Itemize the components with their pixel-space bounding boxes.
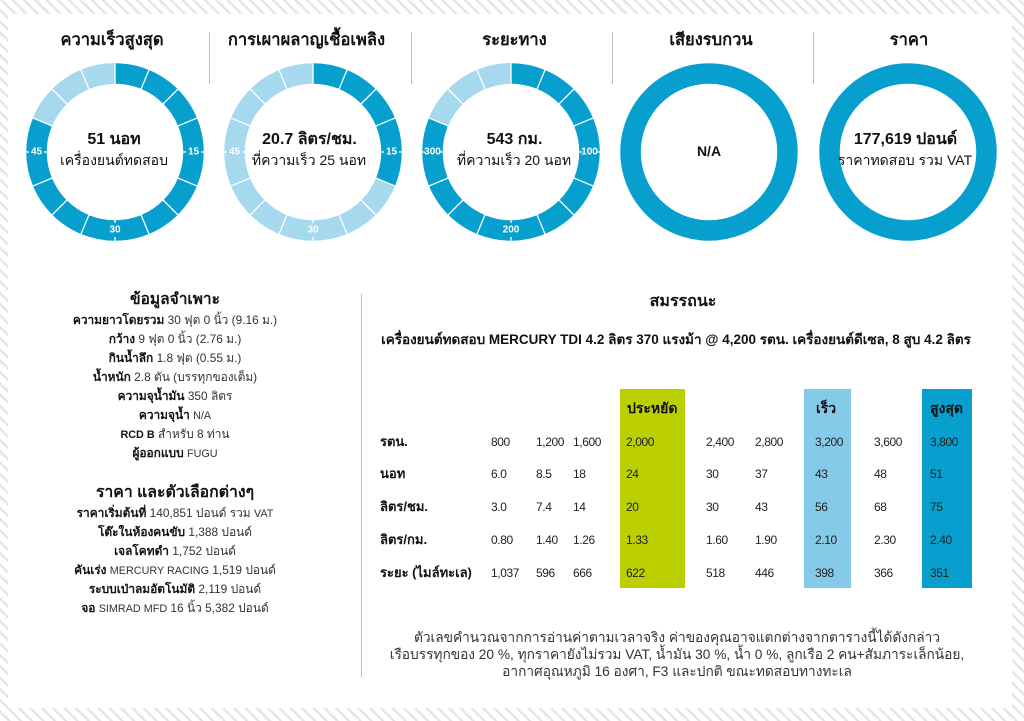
performance table: 666: [573, 566, 592, 580]
performance table: 6.0: [491, 467, 506, 481]
performance table: ลิตร/ชม.: [380, 499, 428, 514]
performance table: 3.0: [491, 500, 506, 514]
performance table: 398: [815, 566, 834, 580]
heading: specifications: ข้อมูลจำเพาะ: [130, 291, 220, 308]
column highlight: economy: [620, 389, 685, 588]
panel: price and options: [74, 484, 276, 615]
performance table: 366: [874, 566, 893, 580]
value: 51 knots: 51 นอท: [87, 131, 141, 148]
performance table: 1,200: [536, 435, 564, 449]
performance table: 2,400: [706, 435, 734, 449]
panel: fuel burn: [224, 27, 402, 241]
heading: price: ราคา: [890, 31, 928, 49]
gauge ring: range: 200: [503, 224, 520, 236]
performance table: 51: [930, 467, 943, 481]
options list: จอ SIMRAD MFD 16 นิ้ว 5,382 ปอนด์: [81, 601, 269, 615]
spec list: น้ำหนัก 2.8 ตัน (บรรทุกของเต็ม): [93, 370, 257, 384]
performance table: 1,037: [491, 566, 519, 580]
performance table: 75: [930, 500, 943, 514]
performance table: 2.40: [930, 533, 952, 547]
value: 177,619 pounds: 177,619 ปอนด์: [854, 131, 957, 148]
column highlight: maximum: [922, 389, 972, 588]
gauge ring: fuel burn: [224, 63, 402, 241]
caption: at 20 knots: ที่ความเร็ว 20 นอท: [457, 152, 571, 168]
gauge ring: top speed: [26, 63, 204, 241]
spec list: กว้าง 9 ฟุต 0 นิ้ว (2.76 ม.): [109, 332, 241, 346]
performance table: 1.40: [536, 533, 558, 547]
performance table: 1.90: [755, 533, 777, 547]
gauge ring: fuel burn: 30: [307, 224, 319, 236]
performance table: 2,000: [626, 435, 654, 449]
performance table: 48: [874, 467, 887, 481]
gauge ring: noise: [620, 63, 798, 241]
heading: price and options: ราคา และตัวเลือกต่างๆ: [96, 484, 254, 501]
performance table: 3,200: [815, 435, 843, 449]
spec list: RCD B สำหรับ 8 ท่าน: [120, 427, 230, 441]
performance table: 446: [755, 566, 774, 580]
heading: range: ระยะทาง: [482, 31, 547, 49]
performance table: 30: [706, 467, 719, 481]
performance table: 518: [706, 566, 725, 580]
panel: specifications: [73, 290, 277, 460]
spec list: [73, 312, 277, 460]
gauge ring: top speed: 15: [188, 146, 199, 158]
panel: noise: [620, 30, 798, 241]
gauge ring: range: 100: [581, 146, 598, 158]
gauge ring: fuel burn: 45: [229, 146, 240, 158]
panel: range: [422, 31, 600, 241]
performance table: 3,600: [874, 435, 902, 449]
spec list: ความยาวโดยรวม 30 ฟุต 0 นิ้ว (9.16 ม.): [73, 313, 277, 327]
spec list: ความจุน้ำ N/A: [139, 408, 211, 422]
value: not available: N/A: [697, 143, 721, 159]
footnote: เรือบรรทุกของ 20 %, ทุกราคายังไม่รวม VAT, น้ำมัน 30 %, น้ำ 0 %, ลูกเรือ 2 คน+สัมภาระเล็กน้อย,: [390, 647, 964, 662]
performance table: 800: [491, 435, 510, 449]
performance table: 43: [755, 500, 768, 514]
performance table: [380, 400, 963, 580]
performance table: 18: [573, 467, 586, 481]
value: 20.7 litres per hour: 20.7 ลิตร/ชม.: [262, 131, 357, 148]
gauge ring: fuel burn: 15: [386, 146, 397, 158]
footnote: [390, 628, 964, 680]
gauge ring: top speed: 45: [31, 146, 42, 158]
performance table: 43: [815, 467, 828, 481]
panel: top speed: [26, 29, 204, 241]
performance table: 68: [874, 500, 887, 514]
heading: performance: สมรรถนะ: [650, 293, 716, 310]
options list: ราคาเริ่มต้นที่ 140,851 ปอนด์ รวม VAT: [77, 506, 273, 520]
performance table: 7.4: [536, 500, 551, 514]
performance table: สูงสุด: [930, 400, 963, 416]
gauge ring: range: [422, 63, 600, 241]
performance table: 2.10: [815, 533, 837, 547]
performance table: รตน.: [380, 434, 408, 449]
options list: คันเร่ง MERCURY RACING 1,519 ปอนด์: [74, 563, 276, 577]
options list: [74, 504, 276, 615]
options list: โต๊ะในห้องคนขับ 1,388 ปอนด์: [98, 525, 252, 539]
performance table: 0.80: [491, 533, 513, 547]
performance table: ลิตร/กม.: [380, 532, 427, 547]
performance table: 30: [706, 500, 719, 514]
caption: at 25 knots: ที่ความเร็ว 25 นอท: [252, 152, 366, 168]
performance table: 3,800: [930, 435, 958, 449]
performance table: 37: [755, 467, 768, 481]
performance table: 8.5: [536, 467, 551, 481]
performance table: ประหยัด: [627, 400, 677, 416]
performance table: 351: [930, 566, 949, 580]
value: 543 km: 543 กม.: [487, 131, 542, 148]
heading: noise: เสียงรบกวน: [669, 31, 753, 49]
gauge ring: price: [819, 63, 997, 241]
gauge ring: range: 300: [424, 146, 441, 158]
footnote: อากาศอุณหภูมิ 16 องศา, F3 และปกติ ขณะทดสอบทางทะเล: [502, 664, 852, 679]
spec list: ความจุน้ำมัน 350 ลิตร: [118, 389, 232, 403]
gauge ring: top speed: 30: [109, 224, 121, 236]
column highlight: fast: [804, 389, 851, 588]
performance table: ระยะ (ไมล์ทะเล): [380, 565, 472, 580]
heading: fuel burn: การเผาผลาญเชื้อเพลิง: [228, 31, 385, 49]
caption: test engine: เครื่องยนต์ทดสอบ: [60, 152, 168, 168]
performance table: 56: [815, 500, 828, 514]
footnote: ตัวเลขคำนวณจากการอ่านค่าตามเวลาจริง ค่าของคุณอาจแตกต่างจากตารางนี้ได้ดังกล่าว: [414, 630, 940, 645]
performance table: 596: [536, 566, 555, 580]
performance table: 1,600: [573, 435, 601, 449]
heading: top speed: ความเร็วสูงสุด: [60, 31, 164, 49]
performance table: 20: [626, 500, 639, 514]
engine description: เครื่องยนต์ทดสอบ MERCURY TDI 4.2 ลิตร 370 แรงม้า @ 4,200 รตน. เครื่องยนต์ดีเซล, 8 สูบ 4.2 ลิตร: [381, 332, 971, 347]
spec list: กินน้ำลึก 1.8 ฟุต (0.55 ม.): [109, 351, 241, 365]
options list: เจลโคทดำ 1,752 ปอนด์: [114, 544, 236, 558]
caption: test price with VAT: ราคาทดสอบ รวม VAT: [838, 152, 972, 168]
options list: ระบบเป่าลมอัตโนมัติ 2,119 ปอนด์: [89, 582, 261, 596]
panel: price: [819, 31, 997, 241]
spec list: ผู้ออกแบบ FUGU: [132, 446, 218, 460]
performance table: 622: [626, 566, 645, 580]
performance table: เร็ว: [816, 400, 836, 416]
performance table: นอท: [380, 466, 405, 481]
performance table: 1.33: [626, 533, 648, 547]
performance table: 14: [573, 500, 586, 514]
performance table: 2,800: [755, 435, 783, 449]
performance table: 1.26: [573, 533, 595, 547]
performance table: 2.30: [874, 533, 896, 547]
performance table: 24: [626, 467, 639, 481]
performance table: 1.60: [706, 533, 728, 547]
